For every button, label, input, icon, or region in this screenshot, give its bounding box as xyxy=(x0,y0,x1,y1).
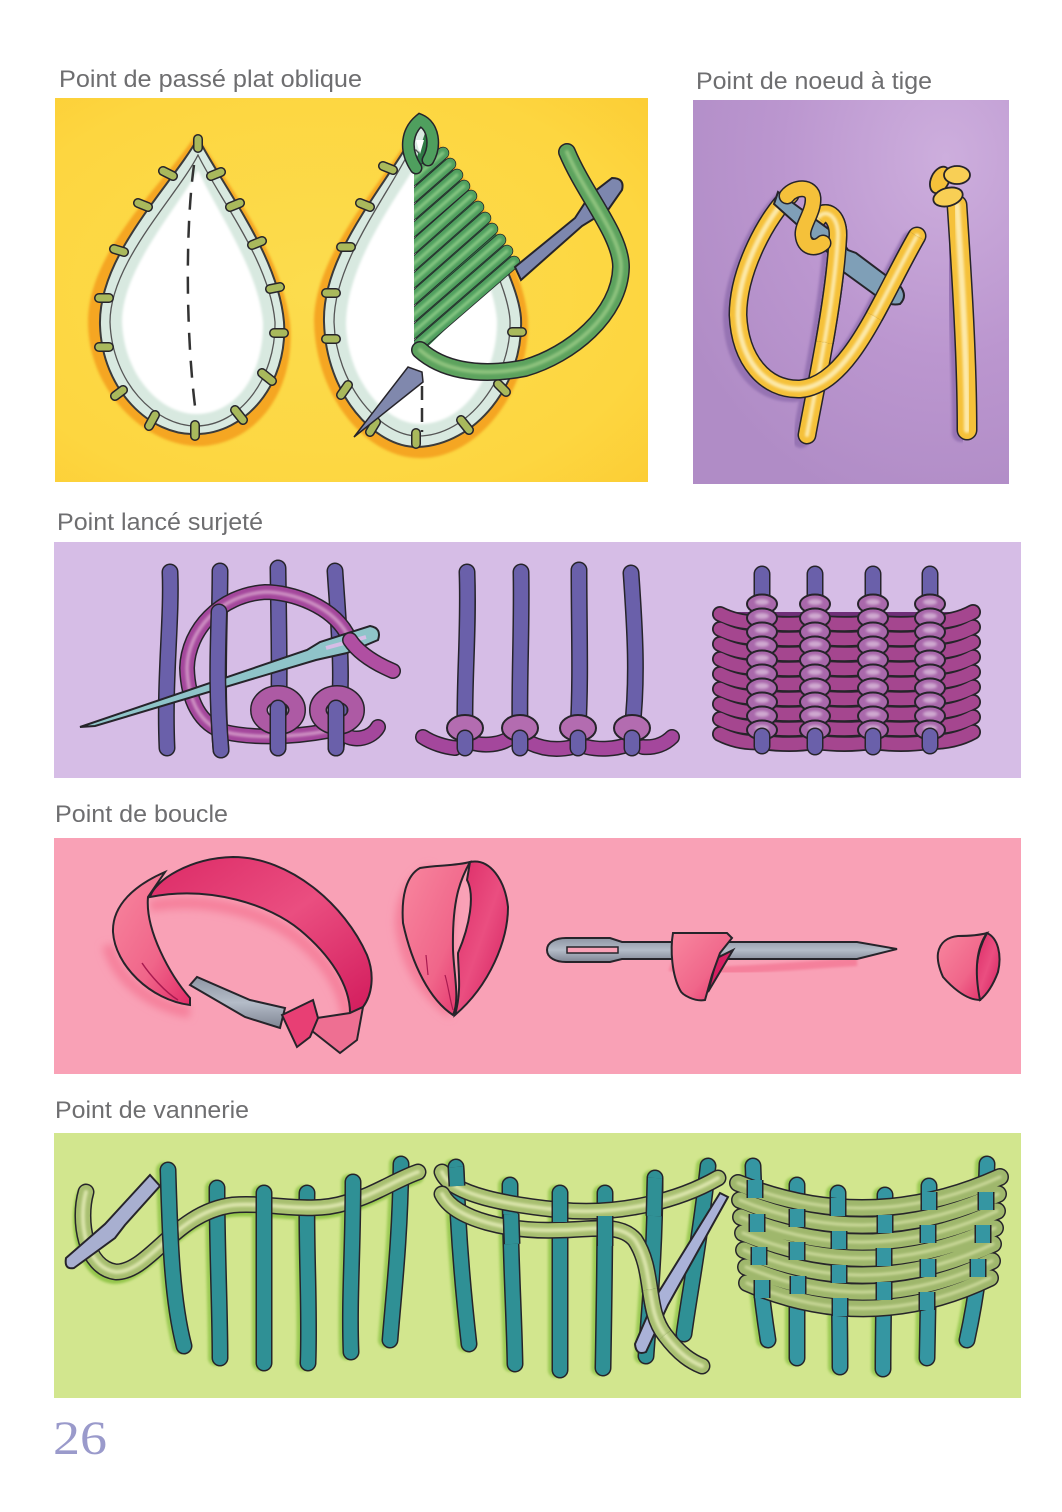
heading: Point de noeud à tige: Point de noeud à tige xyxy=(696,68,932,95)
step two: second row with needle xyxy=(442,1166,728,1370)
heading: Point de boucle: Point de boucle xyxy=(55,801,228,828)
heading: Point de passé plat oblique: Point de passé plat oblique xyxy=(59,66,362,93)
step three: finished basket weave xyxy=(738,1164,1000,1369)
page number: 26 xyxy=(53,1412,107,1465)
finished knot on stem xyxy=(926,164,970,433)
step three: finished ribs xyxy=(718,574,974,747)
heading: Point lancé surjeté: Point lancé surjeté xyxy=(57,509,263,536)
panel: point de noeud à tige xyxy=(693,100,1009,484)
knot in progress with needle xyxy=(732,189,917,439)
step two: anchored bars xyxy=(423,570,672,749)
needle with ribbon xyxy=(547,933,897,1000)
step one: thread through bars xyxy=(66,1164,418,1363)
panel: point de boucle xyxy=(54,838,1021,1074)
folded ribbon loop xyxy=(395,862,508,1018)
icon: needle xyxy=(80,626,379,727)
step one: needle passing under bars xyxy=(80,568,393,750)
green working thread xyxy=(420,152,621,372)
icon: needle xyxy=(66,1175,160,1268)
icon: lower needle xyxy=(354,367,423,437)
panel: point de vannerie xyxy=(54,1133,1021,1398)
heading: Point de vannerie: Point de vannerie xyxy=(55,1097,249,1124)
leaf: stitched diagonal satin with needle xyxy=(314,120,623,458)
icon: needle xyxy=(635,1193,728,1353)
large ribbon loop with needle xyxy=(108,857,372,1053)
panel: point de passé plat oblique xyxy=(55,98,648,482)
panel: point lancé surjeté xyxy=(54,542,1021,778)
finished small loop xyxy=(938,933,1000,1000)
satin stitches xyxy=(408,120,515,358)
leaf: prepared outline with centre line xyxy=(88,134,291,446)
icon: upper needle xyxy=(515,178,623,280)
